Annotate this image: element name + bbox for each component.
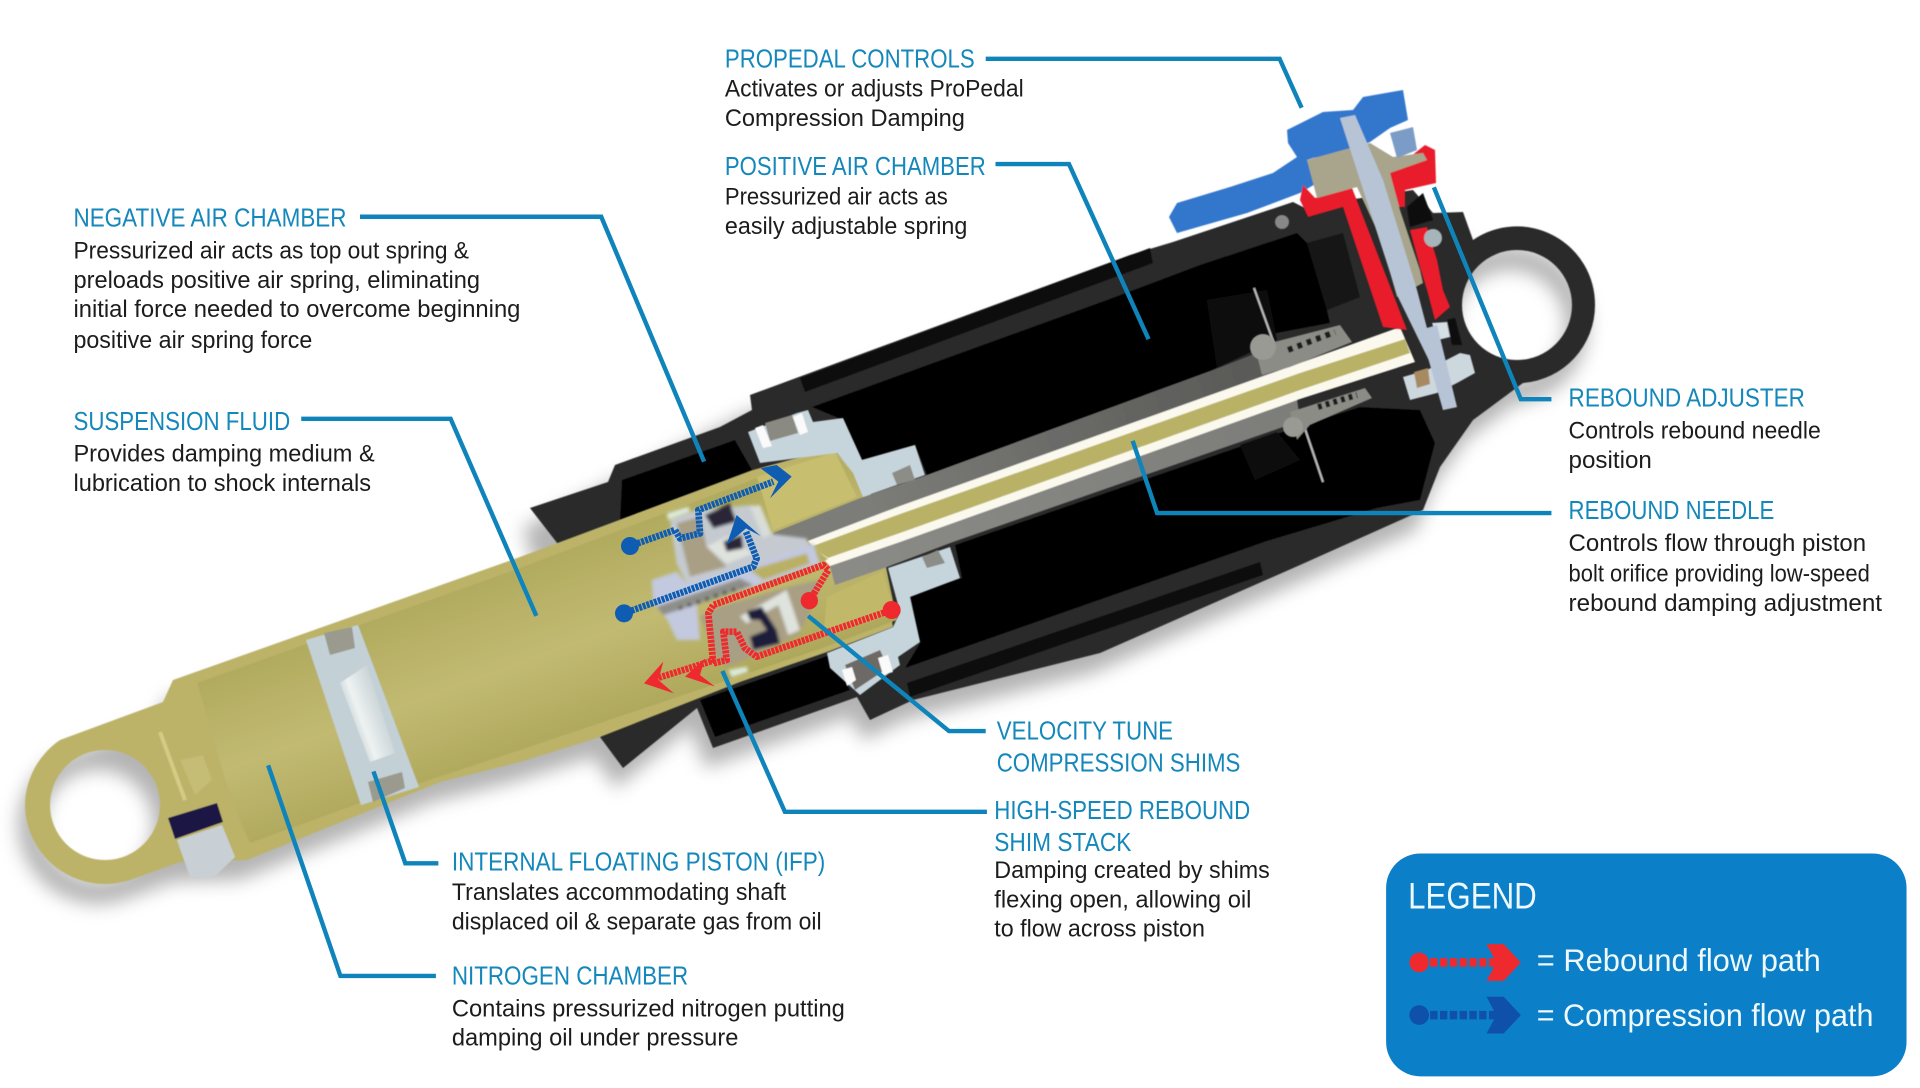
legend: rebound arrow — [1409, 944, 1521, 981]
lug boss — [180, 755, 212, 795]
seal top — [324, 627, 355, 655]
callout: internal floating piston: displaced oil & separate gas from oil — [452, 908, 822, 935]
lower needle nut — [1283, 388, 1372, 440]
rod — [810, 339, 1410, 558]
lower tan cavity — [823, 571, 895, 637]
spacer shade lower — [1240, 432, 1300, 480]
leader: suspension fluid — [301, 419, 536, 616]
silver stem — [1340, 115, 1457, 410]
red chevron 1 — [644, 662, 674, 693]
upper black blocks — [705, 503, 737, 528]
air can body — [530, 190, 1595, 768]
blue chevron 2 — [727, 515, 761, 545]
top seal — [667, 507, 690, 520]
callout: internal floating piston — [452, 849, 825, 935]
callout: propedal controls: PROPEDAL CONTROLS — [725, 45, 975, 73]
adjuster ball — [1424, 229, 1442, 247]
callout: negative air chamber: initial force needed to overcome beginning — [73, 296, 520, 323]
positive chamber upper — [812, 233, 1330, 475]
schrader cap — [168, 803, 223, 839]
sleeve slot upper — [800, 248, 1153, 392]
white port — [1432, 322, 1450, 340]
lower cap seal — [922, 550, 945, 568]
blue dot 2 — [615, 604, 633, 622]
fitting bits — [1414, 368, 1430, 388]
grey shaft sleeve upper — [773, 345, 1295, 548]
callout: rebound needle: rebound damping adjustment — [1569, 590, 1882, 617]
blue chevron 1 — [761, 465, 792, 498]
leader: nitrogen — [268, 765, 436, 976]
legend background — [1386, 853, 1907, 1076]
blue path 1 — [630, 482, 773, 546]
leader: rebound needle — [1133, 441, 1551, 513]
shock shadow — [18, 227, 1588, 904]
callout: positive air chamber: easily adjustable spring — [725, 213, 967, 240]
callout: nitrogen chamber: NITROGEN CHAMBER — [452, 962, 688, 990]
adjuster plate — [1390, 127, 1417, 158]
callout: high-speed rebound: Damping created by shims — [994, 857, 1270, 884]
leader: high-speed rebound — [722, 671, 987, 812]
callout: propedal controls: Activates or adjusts ProPedal — [725, 76, 1024, 103]
callout: high-speed rebound: SHIM STACK — [994, 829, 1131, 857]
callout: high-speed rebound: to flow across piston — [994, 916, 1205, 943]
upper cap grey block — [765, 415, 798, 441]
piston assembly — [652, 503, 820, 677]
legend: compression label: = Compression flow path — [1537, 997, 1873, 1033]
callout: suspension fluid: SUSPENSION FLUID — [73, 408, 290, 436]
callout: propedal controls: Compression Damping — [725, 105, 965, 132]
upper piston silver — [670, 505, 810, 583]
lug rib — [160, 732, 185, 800]
internal floating piston — [306, 625, 419, 805]
lower eyelet and body wall — [25, 448, 893, 884]
callout: internal floating piston: INTERNAL FLOATING PISTON (IFP) — [452, 849, 825, 877]
callout: velocity tune: VELOCITY TUNE — [997, 718, 1173, 746]
callout: positive air chamber: POSITIVE AIR CHAMBER — [725, 153, 986, 181]
callout: high-speed rebound — [994, 797, 1270, 943]
red dot 1 — [883, 601, 901, 619]
red dot 2 — [801, 592, 818, 609]
callout: suspension fluid: Provides damping medium & — [73, 441, 375, 468]
seal bottom — [368, 772, 405, 802]
lower cap white pin 2 — [878, 655, 893, 675]
rebound head — [1169, 90, 1475, 410]
sleeve slot lower — [907, 562, 1263, 697]
bottom seal — [728, 667, 748, 677]
shock absorber cutaway — [25, 90, 1595, 884]
blue path 2 — [624, 532, 757, 613]
lower cap white pin — [842, 667, 856, 686]
callout: propedal controls — [725, 45, 1024, 132]
callout: suspension fluid: lubrication to shock internals — [73, 470, 371, 497]
callout: negative air chamber — [73, 205, 520, 354]
callout: nitrogen chamber: damping oil under pressure — [452, 1025, 738, 1052]
callout: rebound adjuster: Controls rebound needle — [1569, 417, 1821, 444]
legend panel — [1386, 853, 1907, 1076]
schrader screw — [177, 825, 235, 878]
callout: nitrogen chamber: Contains pressurized nitrogen putting — [452, 995, 845, 1022]
grey shaft sleeve lower — [830, 385, 1300, 585]
callout: negative air chamber: preloads positive air spring, eliminating — [73, 267, 480, 294]
upper tan cavity — [757, 452, 857, 530]
bolt tan band — [750, 553, 810, 580]
lower bearing cap — [827, 547, 960, 695]
lower tan body — [25, 448, 897, 884]
shim stack — [657, 578, 753, 615]
callout: rebound needle: Controls flow through piston — [1569, 530, 1866, 557]
callout: negative air chamber: NEGATIVE AIR CHAMBER — [73, 205, 347, 233]
legend title: LEGEND — [1408, 876, 1537, 917]
glide pin upper — [1254, 288, 1277, 352]
callout: negative air chamber: positive air spring force — [73, 327, 312, 354]
flow paths — [615, 465, 901, 693]
head inner pocket — [1307, 233, 1360, 310]
leader: rebound adjuster — [1434, 187, 1551, 399]
damper shaft — [770, 325, 1415, 585]
leader: positive air chamber — [996, 164, 1149, 339]
leader lines — [268, 59, 1551, 976]
can shell and upper eyelet — [530, 190, 1595, 768]
shim notches — [679, 587, 742, 608]
callout: positive air chamber: Pressurized air acts as — [725, 183, 948, 210]
red upper right — [1390, 145, 1436, 207]
nitrogen and oil cavity — [197, 452, 897, 843]
red path rebound — [708, 565, 892, 663]
callout: internal floating piston: Translates accommodating shaft — [452, 879, 786, 906]
legend: rebound label: = Rebound flow path — [1537, 942, 1821, 978]
upper piston tan — [677, 517, 727, 577]
tan adjuster body — [1307, 143, 1427, 297]
end caps — [748, 410, 960, 695]
callout: high-speed rebound: HIGH-SPEED REBOUND — [994, 797, 1250, 825]
fitting stem overlay — [1420, 325, 1457, 410]
positive chamber lower — [905, 407, 1435, 668]
red rebound body — [1300, 185, 1407, 330]
red chevron 2 — [685, 658, 715, 687]
negative chamber lower — [700, 655, 850, 737]
upper black block 2 — [723, 535, 743, 552]
upper piston white — [707, 537, 753, 563]
callout: rebound needle: bolt orifice providing low-speed — [1569, 561, 1870, 588]
callout: velocity tune — [997, 718, 1240, 777]
negative chamber upper — [620, 440, 752, 520]
lower piston tan — [700, 580, 820, 667]
red outlet path — [657, 660, 715, 678]
callout: rebound adjuster: position — [1569, 447, 1652, 474]
callout: rebound needle: REBOUND NEEDLE — [1569, 497, 1774, 525]
glide pin lower — [1302, 420, 1323, 482]
upper cap white pin 2 — [793, 413, 808, 435]
white bar — [750, 505, 772, 538]
upper cap seal — [892, 465, 915, 485]
chamber bolt — [1275, 215, 1289, 229]
upper bearing cap — [748, 410, 925, 497]
piston recess — [340, 665, 395, 762]
lower piston black — [747, 607, 780, 650]
rod tail — [770, 546, 828, 585]
spacer shade upper — [1207, 290, 1277, 368]
lower cap dark block — [845, 650, 888, 690]
piston body — [306, 625, 419, 805]
callout: rebound adjuster: REBOUND ADJUSTER — [1569, 385, 1805, 413]
callout: nitrogen chamber — [452, 962, 845, 1052]
leader: IFP — [373, 771, 438, 863]
callout: positive air chamber — [725, 153, 986, 240]
callout: rebound needle — [1569, 497, 1882, 617]
leader: negative air chamber — [360, 217, 704, 462]
callout: velocity tune: COMPRESSION SHIMS — [997, 749, 1240, 777]
lower silver fitting — [1403, 353, 1475, 400]
main piston — [652, 543, 820, 640]
red lower right — [1410, 227, 1450, 320]
leader: propedal — [986, 59, 1302, 108]
callout: suspension fluid — [73, 408, 375, 497]
callout: negative air chamber: Pressurized air acts as top out spring & — [73, 237, 469, 264]
blue dot 1 — [621, 537, 639, 555]
head black pocket — [1447, 318, 1462, 345]
upper cap white pin — [755, 425, 772, 448]
propedal lever — [1169, 90, 1408, 233]
leader: velocity tune — [808, 616, 986, 731]
black port — [1407, 193, 1433, 227]
upper needle nut — [1250, 325, 1352, 375]
callout: high-speed rebound: flexing open, allowing oil — [994, 886, 1251, 913]
legend: compression arrow — [1409, 997, 1521, 1033]
rod highlight — [808, 327, 1415, 566]
callout: rebound adjuster — [1569, 385, 1821, 474]
lower piston white — [740, 590, 800, 635]
